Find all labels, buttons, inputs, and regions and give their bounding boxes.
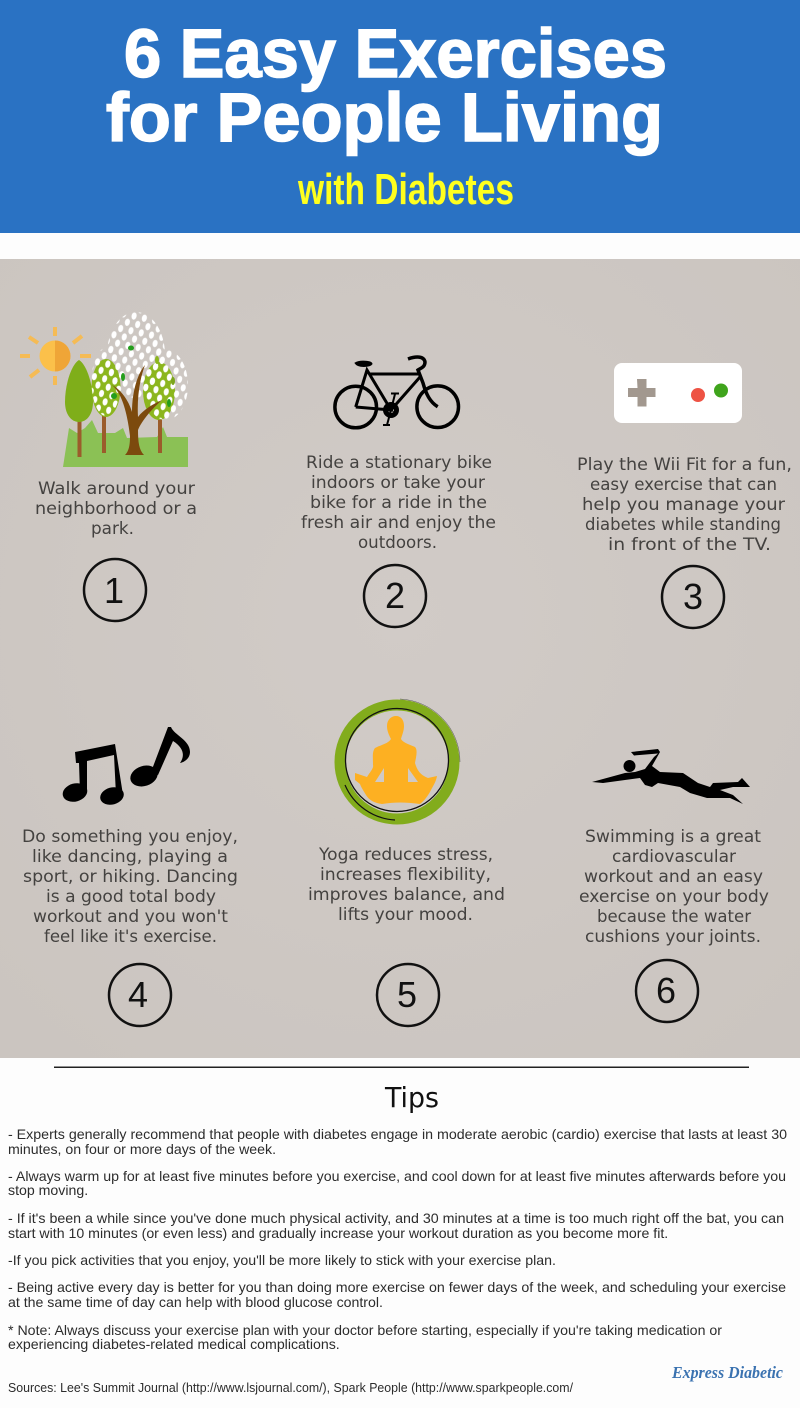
text: dancing: Do something you enjoy, [22,827,238,847]
text: bike: bike for a ride in the [310,493,487,513]
text: swimming [579,827,769,947]
tips text: at the same time of day can help with blood glucose control. [8,1294,383,1310]
text: bike: outdoors. [358,533,437,553]
tips text: experiencing diabetes-related medical complications. [8,1336,340,1352]
title: 6 Easy Exercises [124,15,667,92]
text: wii fit [577,455,792,555]
icon: bicycle [335,357,459,428]
tips text [8,1126,787,1395]
number 3: 3 [683,576,703,617]
text: walk: neighborhood or a [35,499,197,519]
text: yoga: lifts your mood. [338,905,473,925]
text: bike: Ride a stationary bike [306,453,492,473]
text: yoga: increases flexibility, [320,865,491,885]
tips text: minutes, on four or more days of the week. [8,1141,276,1157]
text: swimming: cushions your joints. [585,927,761,947]
tips text: - Experts generally recommend that people with diabetes engage in moderate aerobic (cardio) exercise that lasts at least 30 [8,1126,787,1142]
title [106,15,667,214]
text: swimming: exercise on your body [579,887,769,907]
number 2 [364,565,426,627]
number 4 [109,964,171,1026]
text: swimming: Swimming is a great [585,827,761,847]
tips text: Sources: Lee's Summit Journal (http://www.lsjournal.com/), Spark People (http://www.sparkpeople.com/ [8,1380,573,1395]
title: for People Living [106,79,663,156]
number 2: 2 [385,575,405,616]
text: wii fit: help you manage your [582,495,785,515]
tips text: stop moving. [8,1182,88,1198]
number 5 [377,964,439,1026]
tips text: start with 10 minutes (or even less) and gradually increase your workout duration as you become more fit. [8,1225,668,1241]
icon: game controller [614,363,742,423]
tips text: - Being active every day is better for you than doing more exercise on fewer days of the week, and scheduling your exercise [8,1279,786,1295]
number 5: 5 [397,974,417,1015]
text: dancing: like dancing, playing a [32,847,228,867]
title: with Diabetes [297,165,514,214]
text: dancing: feel like it's exercise. [44,927,217,947]
text: bike [301,453,496,553]
header banner [0,0,800,233]
tips text: - Always warm up for at least five minutes before you exercise, and cool down for at least five minutes afterwards before you [8,1168,786,1184]
text: walk: park. [91,519,134,539]
number 4: 4 [128,974,148,1015]
icon: swimmer [592,749,750,804]
text: bike: fresh air and enjoy the [301,513,496,533]
text: bike: indoors or take your [311,473,485,493]
logo: Express Diabetic: Express Diabetic [671,1363,783,1382]
text: walk: Walk around your [38,479,195,499]
text: swimming: cardiovascular [612,847,736,867]
text: dancing: workout and you won't [33,907,228,927]
text: dancing: sport, or hiking. Dancing [23,867,238,887]
tips text: -If you pick activities that you enjoy, you'll be more likely to stick with your exercise plan. [8,1252,556,1268]
text: yoga: improves balance, and [308,885,505,905]
tips text: * Note: Always discuss your exercise plan with your doctor before starting, especially if you're taking medication or [8,1322,722,1338]
text: yoga: Yoga reduces stress, [318,845,493,865]
text: wii fit: diabetes while standing [585,515,781,535]
icon: trees and sun [20,311,189,467]
number 6: 6 [656,970,676,1011]
text: yoga [308,845,505,925]
number 1 [84,559,146,621]
icon: music notes [61,727,190,807]
number 6 [636,960,698,1022]
tips text: - If it's been a while since you've done much physical activity, and 30 minutes at a time is too much right off the bat, you can [8,1210,784,1226]
icon: yoga figure in ring [340,699,460,820]
text: walk [35,479,197,539]
text: wii fit: easy exercise that can [590,475,777,495]
text: dancing: is a good total body [46,887,216,907]
text: swimming: because the water [597,907,751,927]
text: swimming: workout and an easy [584,867,763,887]
number 1: 1 [104,570,124,611]
tips heading: Tips [384,1081,439,1114]
text: wii fit: in front of the TV. [608,535,771,555]
text: dancing [22,827,238,947]
panel: exercises [0,259,800,1058]
text: wii fit: Play the Wii Fit for a fun, [577,455,792,475]
number 3 [662,566,724,628]
